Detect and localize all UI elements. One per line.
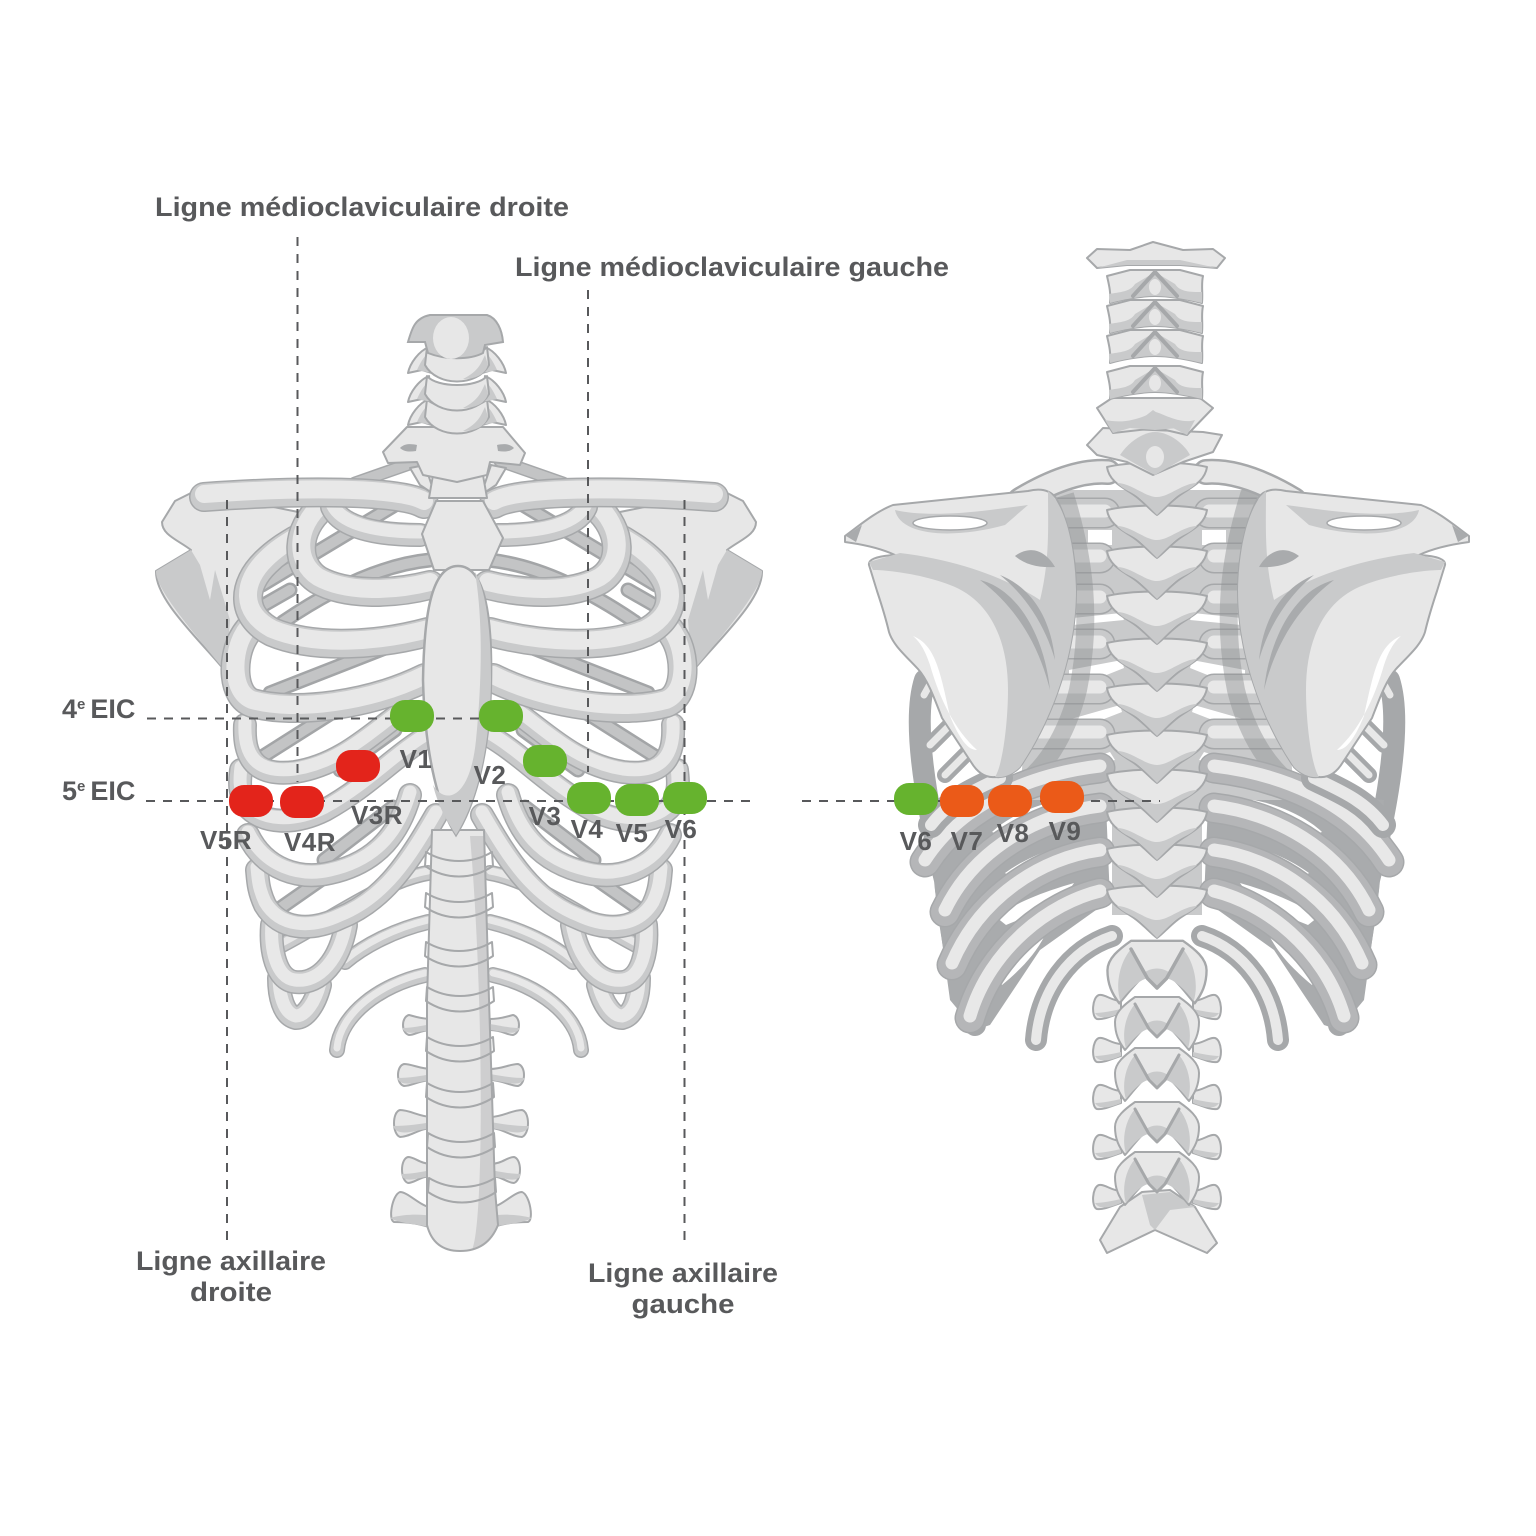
back right half bbox=[1157, 472, 1469, 1040]
lower posterior ribs bbox=[925, 766, 1112, 1040]
front skeleton bbox=[156, 315, 762, 1251]
label V9: V9 bbox=[1049, 816, 1081, 846]
label V5: V5 bbox=[616, 818, 648, 848]
electrode V4R bbox=[280, 786, 324, 818]
electrode V8 bbox=[988, 785, 1032, 817]
label: 5e EIC: 5 bbox=[62, 776, 77, 806]
dark rib backdrop bbox=[930, 780, 1110, 1030]
sixth cervical back bbox=[1097, 398, 1213, 435]
label: ligne axillaire gauche bbox=[588, 1258, 778, 1319]
dashed reference lines bbox=[146, 237, 1160, 1240]
white gaps between lower ribs bbox=[992, 799, 1090, 985]
lumbar vertebrae back bbox=[1093, 941, 1221, 1253]
electrode V5 bbox=[615, 784, 659, 816]
label: 4e EIC: 4 bbox=[62, 694, 77, 724]
upper spine front bbox=[383, 315, 525, 498]
back skeleton bbox=[845, 242, 1469, 1253]
sacral tail bbox=[1100, 1190, 1217, 1253]
white gaps between upper ribs bbox=[1040, 530, 1124, 775]
electrode V7 bbox=[940, 785, 984, 817]
electrode V9 bbox=[1040, 781, 1084, 813]
electrode V4 bbox=[567, 782, 611, 814]
front right half of rib cage bbox=[482, 461, 762, 1050]
label V3: V3 bbox=[529, 801, 561, 831]
label V7: V7 bbox=[951, 826, 983, 856]
transverse wings bbox=[1093, 995, 1221, 1209]
lateral rib outlines bbox=[920, 680, 975, 1025]
electrode V1 bbox=[390, 700, 434, 732]
electrode labels bbox=[200, 744, 1081, 857]
electrodes front bbox=[229, 700, 707, 818]
spine side shadow bbox=[470, 836, 498, 1250]
left shoulder blade bbox=[156, 491, 303, 672]
front left half of rib cage bbox=[156, 461, 436, 1050]
seventh cervical back bbox=[1087, 428, 1222, 475]
cervical stack bbox=[408, 347, 506, 434]
label: ligne axillaire droite: Ligne axillaire bbox=[136, 1246, 326, 1276]
seventh cervical bbox=[383, 427, 525, 482]
label: 4e EIC: e bbox=[77, 696, 85, 713]
label V4: V4 bbox=[571, 814, 603, 844]
first thoracic connecting rib bbox=[355, 461, 418, 483]
sternum manubrium bbox=[422, 501, 503, 570]
atlas bbox=[408, 315, 503, 358]
posterior ribs seen through the chest bbox=[254, 505, 430, 909]
label: 4e EIC: EIC bbox=[90, 694, 135, 724]
lumbar and lower thoracic spine front bbox=[390, 830, 532, 1251]
label: ligne axillaire droite: droite bbox=[190, 1277, 272, 1307]
label V2: V2 bbox=[474, 760, 506, 790]
clavicle bbox=[204, 489, 424, 504]
upper posterior ribs bbox=[1030, 511, 1105, 734]
label V3R: V3R bbox=[351, 800, 403, 830]
label V4R: V4R bbox=[284, 827, 336, 857]
first rib bbox=[332, 504, 420, 535]
title: ligne medioclaviculaire gauche: Ligne médioclaviculaire gauche bbox=[515, 252, 949, 282]
scapula bbox=[845, 490, 1076, 777]
paraspinal rib backdrop bbox=[1020, 490, 1157, 915]
back left half bbox=[845, 472, 1157, 1040]
label: ligne axillaire gauche: gauche bbox=[632, 1289, 734, 1319]
electrode V3R bbox=[336, 750, 380, 782]
label V8: V8 bbox=[997, 818, 1029, 848]
thoracic vertebrae back bbox=[1107, 462, 1207, 938]
cervical vertebrae back bbox=[1087, 242, 1225, 475]
T1 side processes bbox=[410, 465, 506, 495]
title: ligne medioclaviculaire droite: Ligne médioclaviculaire droite bbox=[155, 192, 569, 222]
label: 5e EIC: EIC bbox=[90, 776, 135, 806]
electrodes back bbox=[894, 781, 1084, 817]
label: ligne axillaire gauche: Ligne axillaire bbox=[588, 1258, 778, 1288]
electrode V5R bbox=[229, 785, 273, 817]
label V5R: V5R bbox=[200, 825, 252, 855]
vertebral bodies bbox=[427, 830, 498, 1251]
medial dark band bbox=[1030, 495, 1085, 778]
label V6 back: V6 bbox=[900, 826, 932, 856]
label: 5e EIC: e bbox=[77, 778, 85, 795]
sternum body bbox=[423, 566, 491, 835]
top rib bbox=[1020, 472, 1108, 500]
upper ribs bbox=[235, 504, 430, 708]
vertebral discs bbox=[425, 852, 496, 1202]
label: ligne axillaire droite bbox=[136, 1246, 326, 1307]
electrode V3 bbox=[523, 745, 567, 777]
label V6: V6 bbox=[665, 814, 697, 844]
transverse processes left bbox=[390, 1015, 432, 1228]
label V1: V1 bbox=[400, 744, 432, 774]
lower floating cartilages bbox=[282, 871, 428, 1050]
lumbar bodies bbox=[1115, 1152, 1199, 1205]
electrode V6 back bbox=[894, 783, 938, 815]
electrode V6 bbox=[663, 782, 707, 814]
lowest ribs bbox=[240, 712, 436, 1018]
lateral short ribs bbox=[924, 670, 975, 775]
electrode V2 bbox=[479, 700, 523, 732]
atlas back bbox=[1087, 242, 1225, 268]
